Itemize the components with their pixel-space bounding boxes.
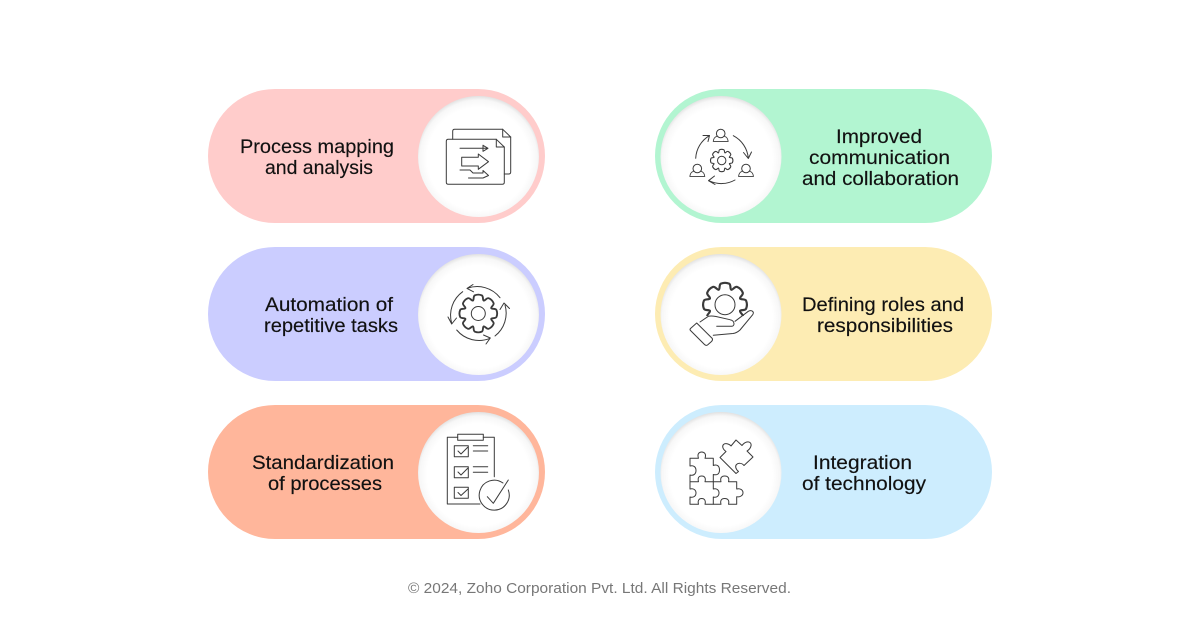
icon circle [418,412,539,533]
pill background [208,89,545,223]
pill background [208,247,545,381]
label: Automation of [265,294,394,316]
icon: puzzle pieces [690,440,753,504]
label [264,294,398,337]
panel: integration of technology [655,405,992,539]
copyright footer: © 2024, Zoho Corporation Pvt. Ltd. All Rights Reserved. [408,581,791,597]
label: Process mapping [240,136,394,158]
pill background [655,89,992,223]
icon: team around a gear [690,129,753,184]
label [802,126,959,190]
panel: process mapping and analysis [208,89,545,223]
label: of technology [802,473,926,495]
icon: gear with cycle arrows [448,284,510,344]
label [240,136,394,179]
label: and collaboration [802,168,959,190]
label [252,452,394,495]
label: and analysis [265,157,373,179]
icon circle [660,96,782,217]
label: Integration [813,452,912,474]
pill background [208,405,545,539]
panel: automation of repetitive tasks [208,247,545,381]
label [802,294,964,337]
pill background [655,405,992,539]
icon circle [660,412,782,533]
label: Defining roles and [802,294,964,316]
icon circle [418,96,539,217]
label: communication [809,147,950,169]
label: of processes [268,473,382,495]
label: repetitive tasks [264,315,398,337]
icon: documents with arrows [446,129,511,184]
panel: improved communication and collaboration [655,89,992,223]
label [802,452,926,495]
label: Improved [836,126,922,148]
label: Standardization [252,452,394,474]
panel: defining roles and responsibilities [655,247,992,381]
panel: standardization of processes [208,405,545,539]
icon circle [418,254,539,375]
icon: hand holding a gear [690,283,753,345]
icon: checklist clipboard [447,434,509,510]
label: responsibilities [817,315,953,337]
icon circle [660,254,782,375]
pill background [655,247,992,381]
